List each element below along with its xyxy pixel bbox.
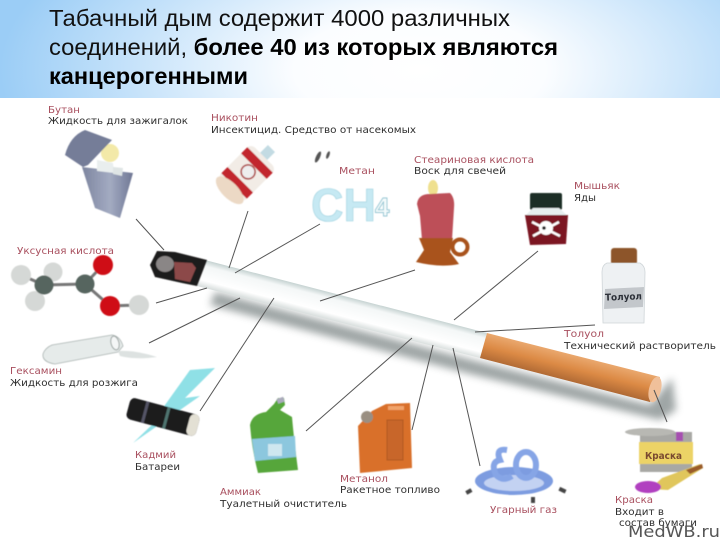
label: methanol: Ракетное топливо: [340, 485, 440, 496]
label: acetic acid: Уксусная кислота: [17, 246, 114, 257]
icon: gas burner flame: [465, 450, 566, 503]
label: methanol: [340, 474, 440, 496]
label: arsenic: [574, 181, 620, 204]
label: arsenic: Яды: [574, 193, 596, 204]
title: канцерогенными: [49, 63, 248, 89]
label: nicotine: [211, 113, 416, 136]
icon: paint can and brush: Краска: [645, 451, 682, 462]
title: соединений, более 40 из которых являются: [49, 34, 558, 60]
label: stearic acid: Воск для свечей: [414, 166, 506, 177]
label: cadmium: Кадмий: [135, 450, 176, 461]
label: paint: [615, 495, 697, 529]
label: hexamine: Гексамин: [10, 366, 62, 377]
icon: lighter: [65, 130, 133, 218]
label: paint: Входит в: [615, 507, 664, 518]
label: ammonia: [219, 487, 347, 510]
label: paint: Краска: [615, 495, 653, 506]
label: methane: Метан: [339, 166, 375, 177]
label: cadmium: Батареи: [135, 462, 180, 473]
icon: orange jerrycan: [358, 403, 412, 473]
label: ammonia: Аммиак: [220, 487, 261, 498]
label: arsenic: Мышьяк: [574, 181, 620, 192]
title: Табачный дым содержит 4000 различных: [49, 5, 511, 31]
label: carbon monoxide: Угарный газ: [490, 505, 557, 516]
icon: battery and lightning: [125, 368, 215, 443]
icon: toluene bottle: [602, 248, 645, 323]
label: toluene: Технический растворитель: [563, 341, 716, 352]
label: hexamine: [10, 366, 138, 389]
label: toluene: Толуол: [563, 329, 604, 340]
label: stearic acid: Стеариновая кислота: [414, 155, 534, 166]
header band: [0, 0, 720, 98]
icon: green cleaner bottle: [250, 397, 298, 473]
icon: acetic acid molecule: [11, 255, 149, 316]
icon: CH4 formula: 4: [375, 192, 390, 222]
label: paint: состав бумаги: [619, 518, 697, 529]
label: butane: Бутан: [48, 105, 80, 116]
icon: candle: [416, 180, 468, 266]
icon: nicotine bottle: [211, 136, 284, 209]
icon: insects: [314, 151, 331, 163]
label: ammonia: Туалетный очиститель: [219, 499, 347, 510]
label: nicotine: Никотин: [211, 113, 258, 124]
label: butane: [48, 105, 188, 127]
label: methanol: Метанол: [340, 474, 388, 485]
icon: arsenic jar: [525, 193, 568, 245]
icon: paint can and brush: [625, 428, 703, 493]
label: butane: Жидкость для зажигалок: [48, 116, 188, 127]
label: nicotine: Инсектицид. Средство от насекомых: [211, 125, 416, 136]
title: [49, 5, 558, 89]
connector lines: [136, 211, 667, 466]
label: toluene: [563, 329, 716, 352]
icon: CH4 formula: CH: [311, 179, 376, 231]
icon: toluene bottle: Толуол: [605, 291, 642, 304]
label: hexamine: Жидкость для розжига: [10, 378, 138, 389]
icon: glass ampoule: [43, 335, 157, 364]
label: stearic acid: [414, 155, 534, 177]
cigarette: [150, 251, 676, 420]
label: cadmium: [135, 450, 180, 473]
